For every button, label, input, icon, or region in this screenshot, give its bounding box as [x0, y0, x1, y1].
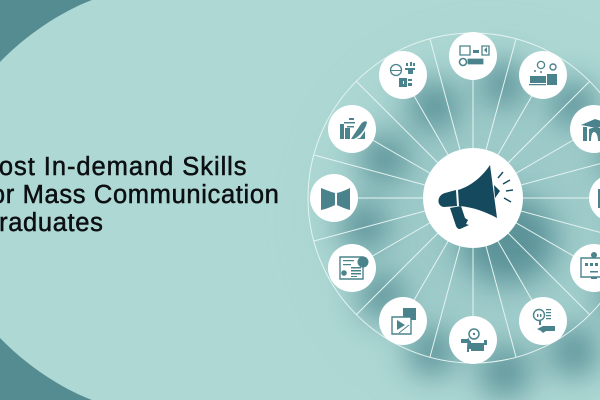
node: left, open book	[310, 174, 358, 222]
node: lower left, video play	[379, 297, 427, 345]
soft node shadows	[339, 60, 600, 399]
background corner: dark teal	[0, 0, 92, 400]
node: top, design layout	[449, 32, 497, 80]
wide haze behind the wheel	[350, 75, 600, 355]
node: right, book	[589, 174, 600, 222]
node: bottom, person at laptop	[449, 316, 497, 364]
node: right upper, graduation cap	[570, 105, 600, 153]
node: upper left, gauge and clipboard	[379, 51, 427, 99]
node: right lower, screen and robot	[570, 244, 600, 292]
nodes: twelve skill icons	[310, 32, 600, 364]
node: lower left, certificate document	[328, 244, 376, 292]
node: upper left, documents and quill	[328, 105, 376, 153]
icon: megaphone	[438, 165, 513, 229]
title	[0, 153, 280, 237]
node: upper right, team and laptop	[519, 51, 567, 99]
wheel: outer ring and spokes	[308, 33, 600, 363]
center hub: megaphone	[423, 148, 523, 248]
node: lower right, speech and hand	[519, 297, 567, 345]
